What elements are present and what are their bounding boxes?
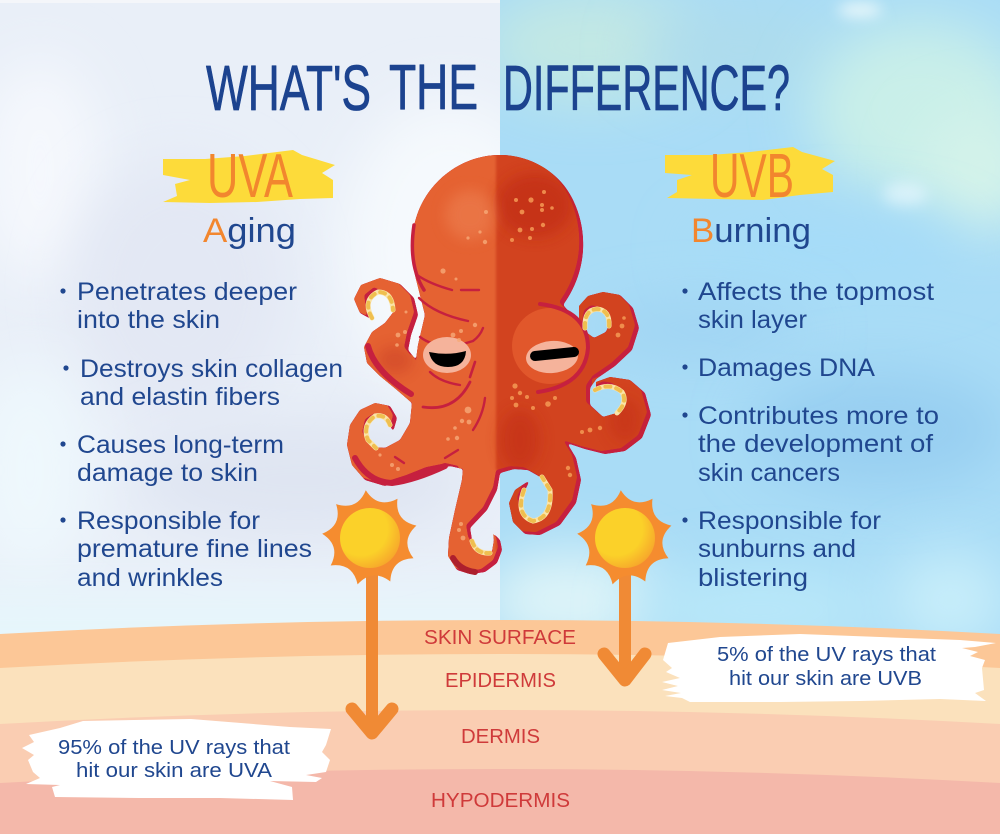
skin spots	[378, 190, 626, 540]
octopus shadow silhouette	[347, 155, 651, 574]
right eye	[525, 339, 579, 375]
UVB bullet list: Damages DNA	[698, 354, 875, 382]
title: WHAT'S	[206, 52, 371, 124]
UVA bullet list: premature fine lines	[77, 535, 312, 563]
UVA bullet list: into the skin	[77, 306, 220, 334]
epidermis label: EPIDERMIS	[445, 670, 556, 692]
title: THE	[389, 51, 478, 123]
layer: skin surface	[0, 620, 1000, 834]
octopus	[343, 152, 651, 574]
UVA heading: UVA	[207, 142, 293, 211]
panel: UVB column	[665, 142, 939, 592]
UVB bullet list	[682, 278, 939, 592]
UVB bullet list: blistering	[698, 564, 808, 592]
UVB bullet list: sunburns and	[698, 535, 856, 563]
UVA bullet list: Destroys skin collagen	[80, 355, 343, 383]
left arrow head	[352, 709, 392, 733]
Aging label: Aging	[203, 212, 296, 250]
UVB bullet list: Affects the topmost	[698, 278, 934, 306]
left sun and arrow	[322, 490, 416, 733]
right arrow head	[604, 654, 645, 680]
skin surface label: SKIN SURFACE	[424, 627, 576, 649]
UVB callout text: 5% of the UV rays that	[717, 644, 936, 666]
callout: UVA 95%	[22, 719, 331, 800]
Burning label: Burning	[691, 212, 811, 250]
octopus body	[343, 152, 647, 571]
title: DIFFERENCE?	[503, 52, 790, 124]
UVA bullet list: and elastin fibers	[80, 383, 280, 411]
UVA bullet list: damage to skin	[77, 459, 258, 487]
right sun	[577, 490, 671, 584]
UVA bullet list: Penetrates deeper	[77, 278, 297, 306]
layer: epidermis	[0, 654, 1000, 834]
UVB heading: UVB	[710, 142, 794, 211]
left eye	[423, 337, 471, 373]
UVB callout text line 2: hit our skin are UVB	[729, 668, 922, 690]
UVA yellow brush	[163, 150, 335, 203]
UVB bullet list: Contributes more to	[698, 402, 939, 430]
UVB bullet list: skin layer	[698, 306, 807, 334]
UVA callout text: 95% of the UV rays that	[58, 737, 290, 759]
left arrow shaft	[366, 570, 378, 732]
skin layers	[0, 620, 1000, 834]
UVA bullet list: Causes long-term	[77, 431, 284, 459]
title	[206, 51, 790, 124]
UVA bullet list	[60, 278, 343, 592]
UVA callout text line 2: hit our skin are UVA	[76, 760, 273, 782]
dermis label: DERMIS	[461, 726, 540, 748]
right sun and arrow	[577, 490, 671, 680]
right arrow shaft	[619, 570, 631, 678]
callout: UVB 5%	[662, 634, 996, 702]
UVA bullet list: Responsible for	[77, 507, 260, 535]
left sun	[322, 490, 416, 584]
UVB bullet list: skin cancers	[698, 459, 840, 487]
panel: UVA column	[60, 142, 343, 592]
UVB bullet list: the development of	[698, 430, 933, 458]
tentacle suckers	[366, 292, 624, 553]
right eye bulge	[512, 308, 588, 384]
UVB bullet list: Responsible for	[698, 507, 881, 535]
right eye bulge rim	[538, 304, 588, 392]
hypodermis label: HYPODERMIS	[431, 790, 570, 812]
left head edge	[412, 225, 424, 290]
UVA bullet list: and wrinkles	[77, 564, 223, 592]
UVB yellow brush	[665, 147, 835, 200]
crimson arm bands	[355, 275, 485, 572]
layer: dermis	[0, 710, 1000, 834]
layer: hypodermis	[0, 769, 1000, 834]
